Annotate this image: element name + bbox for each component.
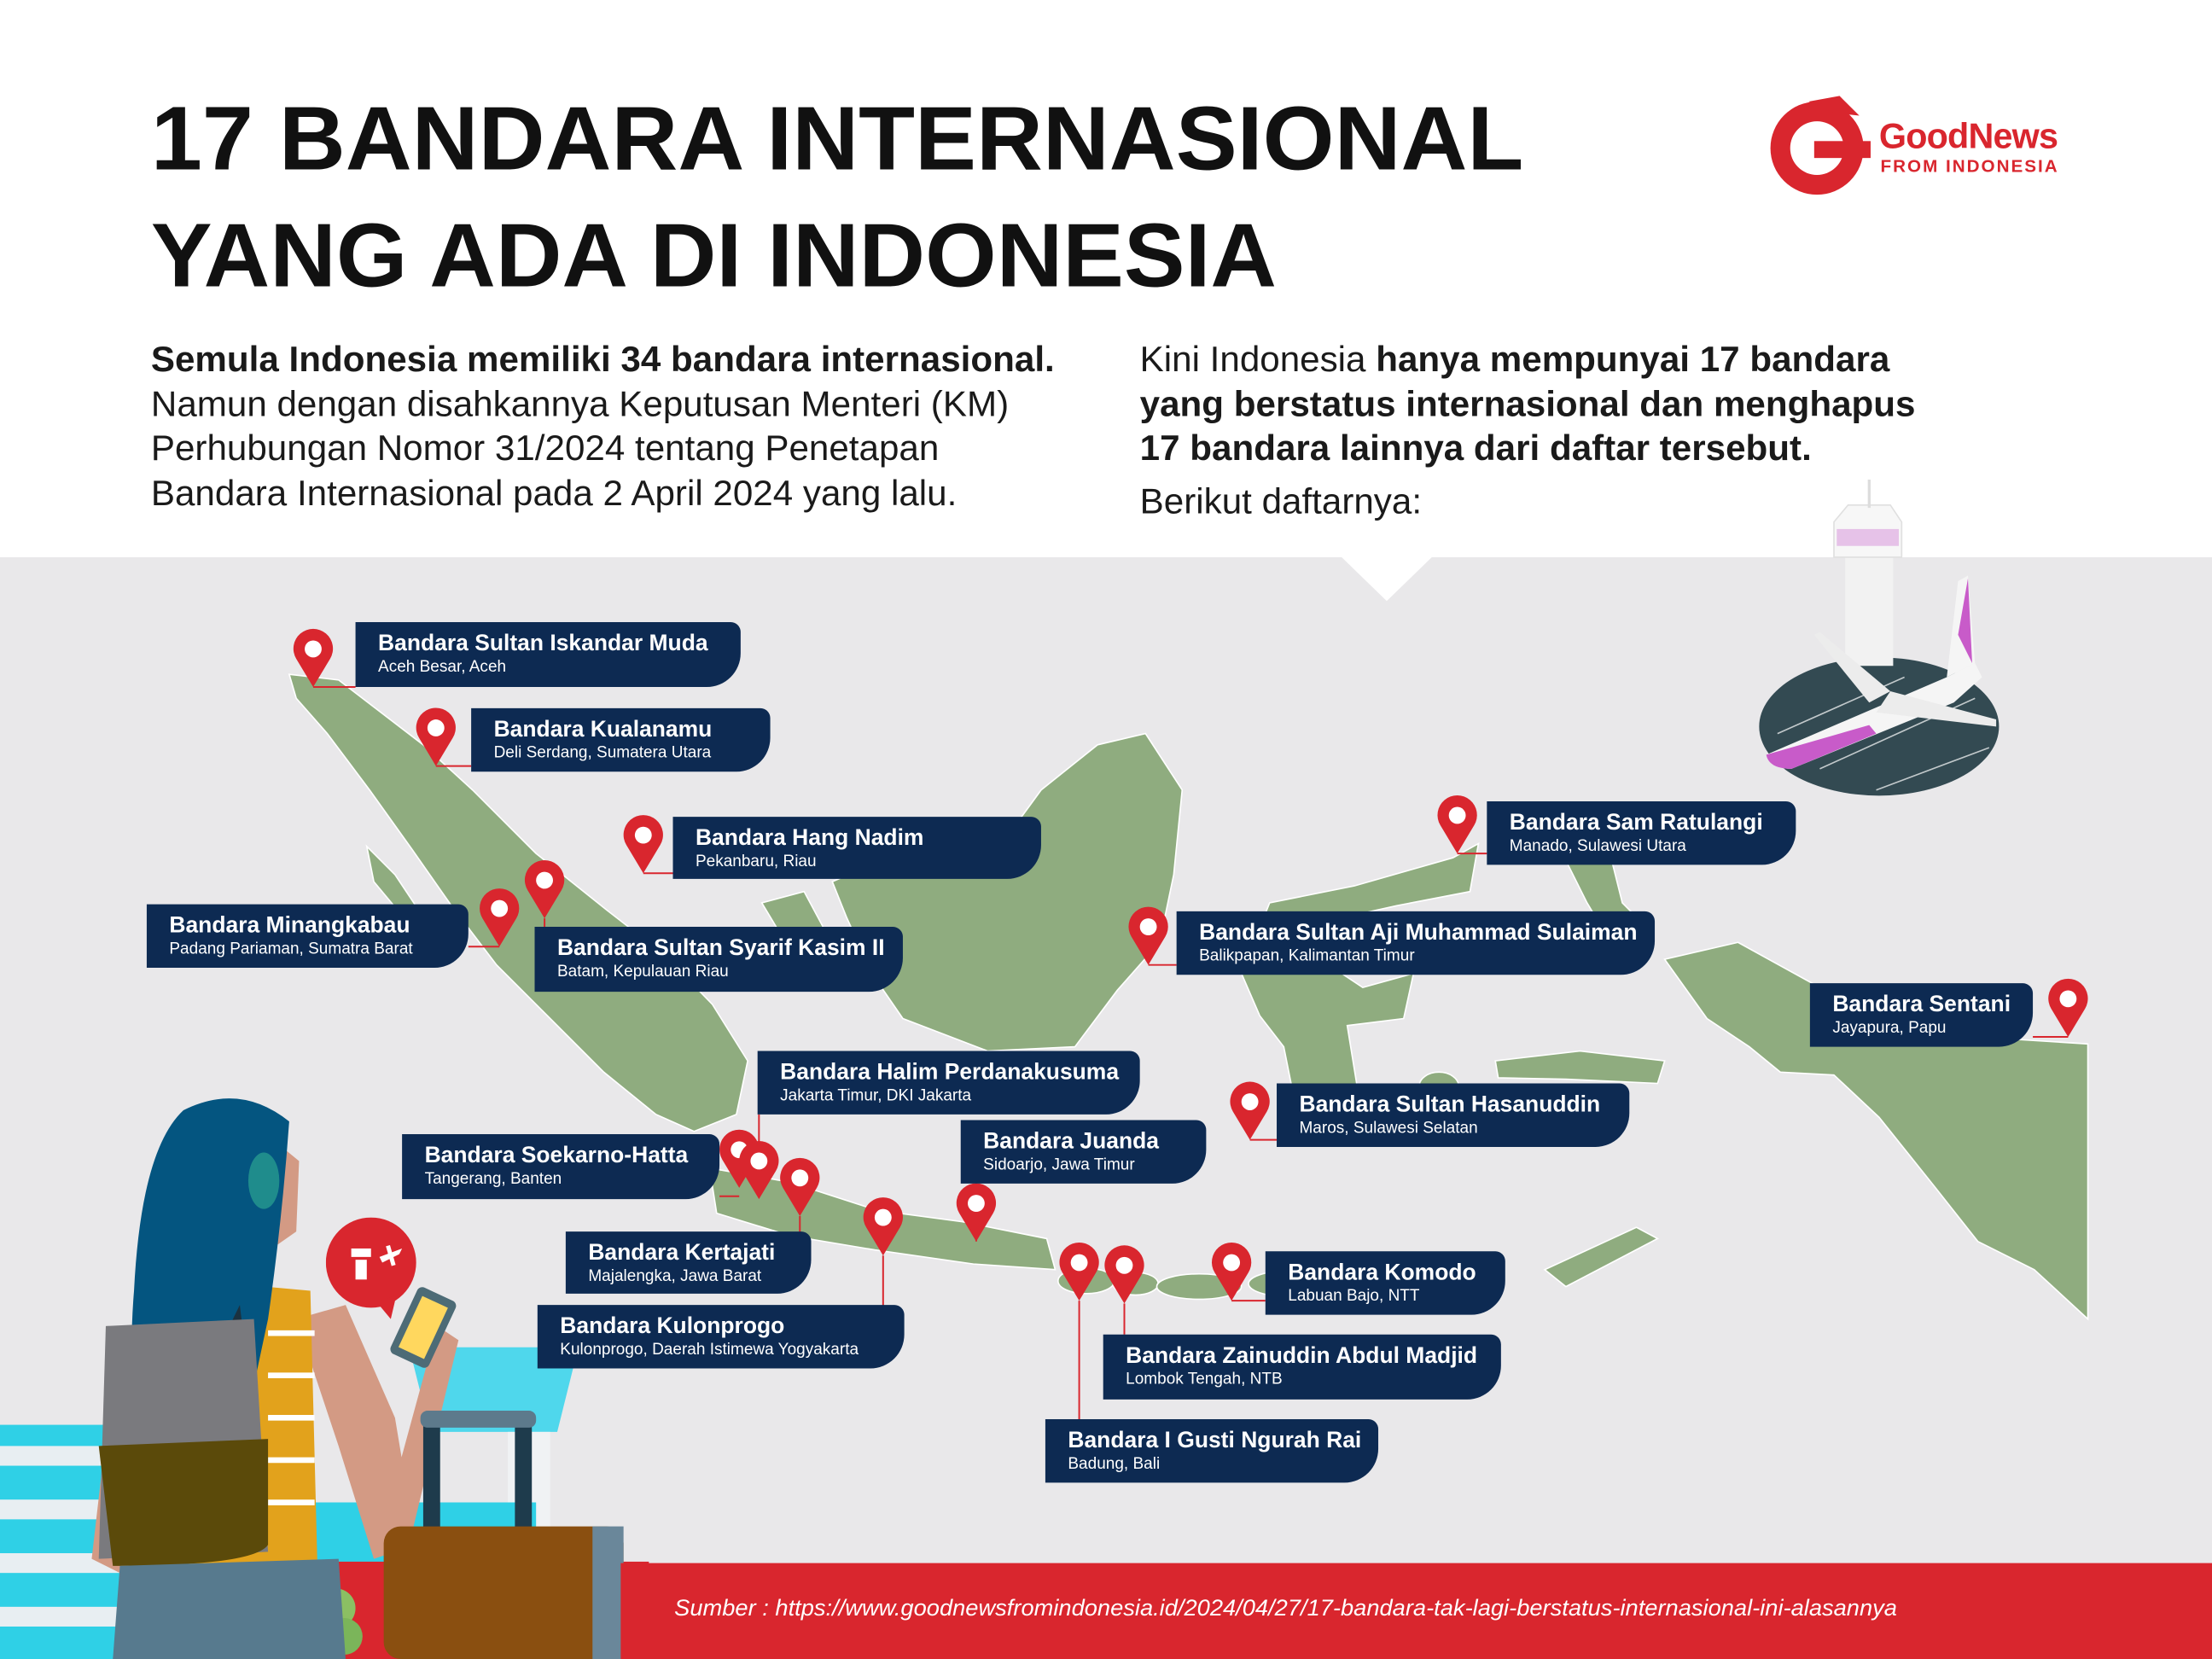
label: Sultan Iskandar Muda: Bandara Sultan Iskandar Muda: [378, 632, 708, 656]
label: Kulonprogo: Kulonprogo, Daerah Istimewa Yogyakarta: [560, 1342, 859, 1359]
label: Sultan Syarif Kasim II: Batam, Kepulauan Riau: [557, 963, 729, 981]
intro text right: [1140, 340, 1916, 521]
label: Kualanamu: [471, 708, 771, 771]
label: Sultan Iskandar Muda: Aceh Besar, Aceh: [378, 659, 506, 676]
intro text right: yang berstatus internasional dan menghapus: [1140, 384, 1916, 424]
label: Komodo: Labuan Bajo, NTT: [1288, 1288, 1420, 1305]
label: Hang Nadim: Pekanbaru, Riau: [696, 853, 817, 870]
intro text left: Bandara Internasional pada 2 April 2024 yang lalu.: [151, 474, 957, 513]
label: Soekarno-Hatta: [402, 1134, 719, 1199]
right arm: [296, 1305, 416, 1559]
label: Soekarno-Hatta: Bandara Soekarno-Hatta: [425, 1144, 688, 1168]
label: Kulonprogo: [538, 1305, 905, 1368]
title: 17 BANDARA INTERNASIONAL: [151, 88, 1523, 189]
map background panel: [0, 557, 2212, 1563]
label: Sultan Syarif Kasim II: Bandara Sultan Syarif Kasim II: [557, 937, 885, 961]
label: Sultan Hasanuddin: Bandara Sultan Hasanuddin: [1299, 1093, 1600, 1117]
intro text left: Perhubungan Nomor 31/2024 tentang Penetapan: [151, 429, 939, 469]
label: Sultan Hasanuddin: Maros, Sulawesi Selatan: [1299, 1121, 1478, 1137]
label: Minangkabau: [147, 905, 469, 968]
label: Komodo: Bandara Komodo: [1288, 1261, 1476, 1285]
label: Sultan Aji Muhammad Sulaiman: Bandara Sultan Aji Muhammad Sulaiman: [1199, 921, 1638, 946]
label: Minangkabau: Bandara Minangkabau: [169, 914, 410, 938]
logo: [1770, 96, 2059, 195]
label: Sultan Hasanuddin: [1277, 1084, 1629, 1147]
source text: Sumber : https://www.goodnewsfromindonesia.id/2024/04/27/17-bandara-tak-lagi-berstatus-internasional-ini-alasannya: [674, 1596, 1897, 1621]
backpack: [99, 1319, 268, 1559]
label: I Gusti Ngurah Rai: Bandara I Gusti Ngurah Rai: [1068, 1429, 1361, 1453]
headphone: [248, 1153, 279, 1209]
label: Sam Ratulangi: Manado, Sulawesi Utara: [1510, 838, 1686, 855]
label: Komodo: [1266, 1251, 1505, 1315]
label: Minangkabau: Padang Pariaman, Sumatra Barat: [169, 941, 413, 958]
intro text left: Semula Indonesia memiliki 34 bandara internasional.: [151, 340, 1055, 380]
label: Juanda: Bandara Juanda: [983, 1130, 1159, 1154]
intro text left: Namun dengan disahkannya Keputusan Menteri (KM): [151, 384, 1009, 424]
shirt: [141, 1284, 317, 1573]
label: Sultan Syarif Kasim II: [535, 927, 903, 992]
intro text left: [151, 340, 1055, 513]
title: YANG ADA DI INDONESIA: [151, 206, 1277, 306]
suitcase: [423, 1415, 440, 1556]
label: Kualanamu: Deli Serdang, Sumatera Utara: [494, 745, 711, 762]
label: Hang Nadim: [673, 817, 1041, 879]
label: Sultan Aji Muhammad Sulaiman: Balikpapan, Kalimantan Timur: [1199, 948, 1415, 965]
label: Sam Ratulangi: Bandara Sam Ratulangi: [1510, 812, 1763, 835]
label: Hang Nadim: Bandara Hang Nadim: [696, 827, 923, 851]
label: Sentani: [1810, 983, 2033, 1047]
label: Kertajati: [566, 1231, 812, 1294]
phone: [388, 1285, 458, 1370]
label: Sam Ratulangi: [1487, 801, 1796, 864]
notch pointer: [1342, 557, 1432, 601]
label: I Gusti Ngurah Rai: [1045, 1419, 1378, 1482]
plane and tower illustration: [1759, 480, 1999, 795]
label: Sultan Iskandar Muda: [356, 622, 741, 687]
label: I Gusti Ngurah Rai: Badung, Bali: [1068, 1456, 1160, 1473]
chat bubble icon: [326, 1217, 416, 1319]
airport building background: [0, 1347, 649, 1659]
label: Juanda: [961, 1121, 1206, 1184]
label: Soekarno-Hatta: Tangerang, Banten: [425, 1171, 562, 1188]
label: Zainuddin Abdul Madjid: [1103, 1335, 1501, 1400]
label: Kulonprogo: Bandara Kulonprogo: [560, 1315, 784, 1339]
traveler woman illustration: [92, 1098, 624, 1659]
label: Sentani: Jayapura, Papu: [1832, 1020, 1946, 1037]
logo text: GoodNews: [1879, 117, 2058, 156]
label: Kualanamu: Bandara Kualanamu: [494, 718, 712, 742]
intro text right: Kini Indonesia hanya mempunyai 17 bandara: [1140, 340, 1889, 380]
hair: [131, 1098, 289, 1467]
label: Sultan Aji Muhammad Sulaiman: [1177, 911, 1655, 975]
label: Juanda: Sidoarjo, Jawa Timur: [983, 1157, 1135, 1173]
face: [268, 1136, 299, 1251]
label: Kertajati: Bandara Kertajati: [588, 1242, 775, 1266]
intro text right: 17 bandara lainnya dari daftar tersebut.: [1140, 429, 1812, 469]
label: Halim Perdanakusuma: Jakarta Timur, DKI Jakarta: [780, 1088, 971, 1104]
intro text right: Berikut daftarnya:: [1140, 482, 1422, 521]
title: [151, 88, 1523, 306]
label: Halim Perdanakusuma: [758, 1051, 1140, 1115]
logo: FROM INDONESIA: [1881, 156, 2059, 177]
label: Halim Perdanakusuma: Bandara Halim Perdanakusuma: [780, 1061, 1119, 1085]
logo icon: [1770, 96, 1871, 195]
jeans: [113, 1559, 346, 1659]
label: Kertajati: Majalengka, Jawa Barat: [588, 1268, 761, 1285]
label: Zainuddin Abdul Madjid: Bandara Zainuddin Abdul Madjid: [1126, 1344, 1477, 1368]
left arm: [91, 1376, 141, 1573]
label: Zainuddin Abdul Madjid: Lombok Tengah, NTB: [1126, 1371, 1283, 1388]
footer source bar: [620, 1563, 2212, 1659]
label: Sentani: Bandara Sentani: [1832, 993, 2011, 1017]
